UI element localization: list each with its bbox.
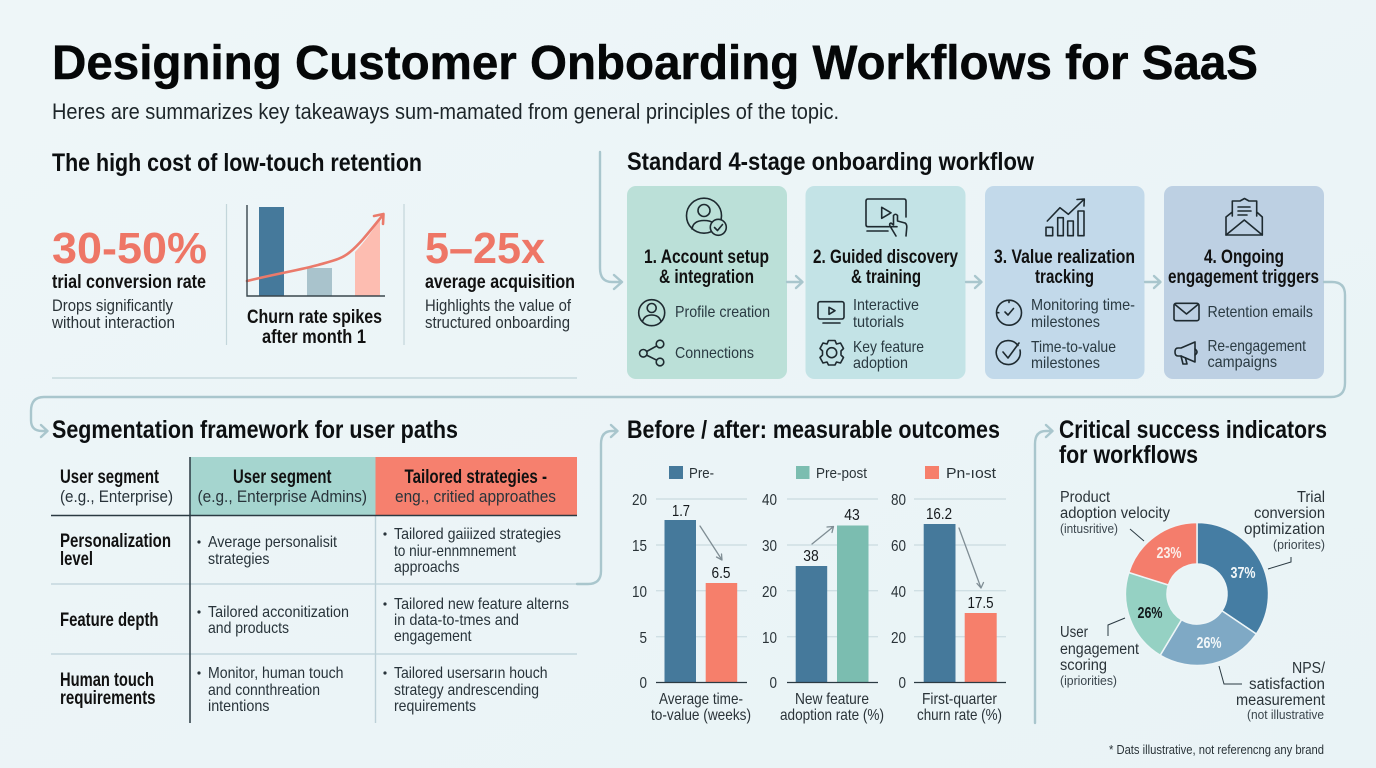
icon: connections — [640, 340, 664, 366]
donut percentages — [1138, 545, 1256, 652]
label: user engagement scoring: scoring — [1060, 657, 1107, 674]
row: personalization level — [60, 526, 561, 576]
row: human touch requirements: requirements — [60, 688, 156, 709]
card: account setup: 1. Account setup — [644, 247, 769, 268]
panel: before and after outcomes — [627, 416, 1006, 724]
label: product adoption velocity: Product — [1060, 489, 1111, 506]
card: ongoing engagement: Retention emails — [1208, 304, 1313, 321]
label: product adoption velocity: adoption velocity — [1060, 505, 1170, 522]
icon: video tutorial — [866, 199, 907, 236]
subtitle: Heres are summarizes key takeaways sum-mamated from general principles of the topic. — [52, 99, 839, 124]
chart: first-quarter churn: 16.2 — [926, 506, 952, 523]
label: NPS satisfaction measurement: (not illustrative — [1247, 707, 1324, 722]
chart: time to value: 0 — [640, 675, 647, 692]
row: personalization level: approachs — [394, 559, 460, 576]
card: ongoing engagement: engagement triggers — [1168, 267, 1319, 288]
icon: clock — [996, 300, 1022, 325]
donut percentages: 23% — [1156, 545, 1182, 562]
heading: outcomes: Before / after: measurable outcomes — [627, 416, 1000, 444]
panel: standard 4-stage workflow — [627, 148, 1324, 379]
chart: first-quarter churn: 20 — [891, 630, 906, 647]
chart: first-quarter churn: 80 — [891, 492, 906, 509]
chart: first-quarter churn: 17.5 — [968, 595, 994, 612]
chart: time to value: 10 — [632, 584, 647, 601]
donut percentages: 26% — [1138, 605, 1163, 622]
card: value realization: Monitoring time- — [1031, 297, 1135, 314]
label: user engagement scoring: User — [1060, 624, 1088, 641]
card: guided discovery — [806, 186, 966, 379]
card: account setup: Connections — [675, 345, 754, 362]
stat: average acquisition: Highlights the value of — [425, 297, 571, 315]
legend — [669, 465, 997, 482]
label: NPS satisfaction measurement: NPS/ — [1292, 660, 1326, 677]
row: human touch requirements: Monitor, human touch — [208, 665, 344, 682]
chart: feature adoption: 20 — [762, 584, 777, 601]
card: guided discovery: & training — [851, 267, 921, 288]
row: human touch requirements — [60, 665, 548, 715]
card: value realization: Time-to-value — [1031, 339, 1116, 356]
chart: first-quarter churn: churn rate (%) — [917, 707, 1002, 724]
row: human touch requirements: requirements — [394, 698, 476, 715]
table header: (e.g., Enterprise) — [60, 487, 173, 506]
arrow: retention to workflow — [600, 152, 622, 289]
card: guided discovery: adoption — [853, 355, 908, 372]
label: trial conversion optimization: optimization — [1244, 521, 1325, 538]
arrow: stage 2 to 3 — [966, 276, 982, 288]
card: guided discovery: tutorials — [853, 314, 904, 331]
arrow: outcomes to indicators — [1035, 425, 1052, 723]
row: personalization level: to niur-ennmnement — [394, 543, 516, 560]
heading: indicators: Critical success indicators — [1059, 416, 1327, 444]
row: personalization level: level — [60, 549, 93, 570]
arrow: stage 1 to 2 — [787, 276, 802, 288]
label: user engagement scoring — [1060, 618, 1140, 688]
stat: trial conversion: trial conversion rate — [52, 272, 206, 293]
chart: time to value: 20 — [632, 492, 647, 509]
stat: average acquisition: average acquisition — [425, 272, 575, 293]
row: feature depth: engagement — [394, 628, 472, 645]
row: feature depth: Tailored acconitization — [208, 604, 349, 621]
panel: high cost of low-touch retention — [51, 149, 577, 378]
row: feature depth: in data-to-tmes and — [394, 612, 519, 629]
label: trial conversion optimization: (priorites) — [1273, 537, 1325, 552]
chart: churn rate spike: Churn rate spikes — [247, 307, 382, 328]
icon: tutorials — [818, 302, 844, 323]
chart: time to value: 1.7 — [672, 503, 690, 520]
table header: User segment — [60, 467, 160, 488]
icon: profile — [639, 300, 665, 326]
table header: (e.g., Enterprise Admins) — [198, 487, 367, 506]
label: NPS satisfaction measurement: satisfaction — [1249, 676, 1325, 693]
row: human touch requirements: intentions — [208, 698, 270, 715]
heading: segmentation: Segmentation framework for user paths — [52, 416, 458, 444]
label: trial conversion optimization: conversion — [1254, 505, 1325, 522]
chart: feature adoption: New feature — [795, 691, 869, 708]
chart: first-quarter churn: 40 — [891, 584, 906, 601]
stat: trial conversion: 30-50% — [52, 224, 207, 273]
row: personalization level: Average personalisit — [208, 534, 337, 551]
icon: megaphone — [1175, 342, 1197, 364]
icon: gear — [820, 340, 844, 365]
card: value realization: 3. Value realization — [994, 247, 1135, 268]
chart: churn rate spike: after month 1 — [262, 327, 366, 348]
row: personalization level: Personalization — [60, 531, 171, 552]
row: personalization level: strategies — [208, 551, 270, 568]
chart: feature adoption: 30 — [762, 538, 777, 555]
legend: Pn-ıost — [946, 465, 997, 482]
table header — [60, 457, 577, 515]
title: Designing Customer Onboarding Workflows for SaaS — [52, 37, 1258, 90]
heading: indicators: for workflows — [1059, 441, 1198, 469]
row: feature depth — [60, 596, 569, 645]
row: feature depth: Tailored new feature alterns — [394, 596, 569, 613]
arrow: workflow to segmentation — [31, 282, 1345, 437]
stat: average acquisition: 5–25x — [425, 224, 546, 273]
icon: growth chart — [1046, 199, 1084, 236]
label: NPS satisfaction measurement — [1219, 660, 1326, 722]
card: account setup: & integration — [659, 267, 754, 288]
icon: mail — [1174, 303, 1199, 321]
donut percentages: 37% — [1230, 565, 1256, 582]
chart: time to value — [632, 492, 751, 724]
row: personalization level: Tailored gaiiized strategies — [394, 526, 561, 543]
legend: Pre-post — [816, 465, 868, 482]
card: ongoing engagement: Re-engagement — [1208, 338, 1306, 355]
card: value realization: milestones — [1031, 314, 1100, 331]
chart: first-quarter churn: 60 — [891, 538, 906, 555]
chart: feature adoption — [762, 492, 884, 724]
row: human touch requirements: strategy andrescending — [394, 682, 539, 699]
card: ongoing engagement: 4. Ongoing — [1204, 247, 1284, 268]
stat: average acquisition — [425, 224, 575, 332]
heading: retention: The high cost of low-touch retention — [52, 149, 422, 177]
chart: feature adoption: 40 — [762, 492, 777, 509]
donut percentages: 26% — [1196, 635, 1222, 652]
row: feature depth: and products — [208, 620, 289, 637]
chart: feature adoption: 10 — [762, 630, 777, 647]
chart: time to value: 5 — [640, 630, 647, 647]
chart: feature adoption: adoption rate (%) — [780, 707, 884, 724]
label: product adoption velocity: (intusritive) — [1060, 521, 1118, 536]
table header: eng., critied approathes — [395, 487, 556, 506]
stat: trial conversion: Drops significantly — [52, 297, 174, 315]
card: account setup — [627, 186, 787, 379]
arrow: stage 3 to 4 — [1145, 276, 1160, 288]
label: product adoption velocity — [1060, 489, 1170, 541]
chart: time to value: 6.5 — [712, 565, 731, 582]
heading: workflow: Standard 4-stage onboarding workflow — [627, 148, 1034, 176]
row: human touch requirements: Human touch — [60, 670, 154, 691]
icon: user check — [686, 198, 726, 235]
chart: first-quarter churn: 0 — [898, 675, 906, 692]
label: trial conversion optimization — [1244, 489, 1325, 569]
row: human touch requirements: Tailored usersarın houch — [394, 665, 548, 682]
chart: first-quarter churn — [891, 492, 1006, 724]
chart: feature adoption: 43 — [844, 507, 860, 524]
card: value realization: milestones — [1031, 355, 1100, 372]
card: account setup: Profile creation — [675, 304, 770, 321]
row: human touch requirements: and connthreation — [208, 682, 320, 699]
heading: indicators — [1059, 416, 1327, 469]
chart: time to value: 15 — [632, 538, 647, 555]
icon: check circle — [996, 341, 1020, 365]
chart: feature adoption: 0 — [770, 675, 777, 692]
panel: critical success indicators — [1059, 416, 1327, 722]
card: guided discovery: 2. Guided discovery — [813, 247, 958, 268]
chart: churn rate spike — [247, 205, 385, 348]
stat: average acquisition: structured onboarding — [425, 314, 570, 332]
card: value realization — [985, 186, 1144, 379]
label: user engagement scoring: engagement — [1060, 641, 1140, 658]
row: feature depth: Feature depth — [60, 610, 158, 631]
donut chart — [1125, 522, 1269, 666]
legend: Pre- — [689, 465, 714, 482]
label: trial conversion optimization: Trial — [1297, 489, 1325, 506]
table header: Tailored strategies - — [404, 467, 547, 488]
card: value realization: tracking — [1035, 267, 1094, 288]
arrow: segmentation to outcomes — [577, 425, 618, 584]
stat: trial conversion: without interaction — [51, 314, 175, 332]
icon: envelope with letter — [1226, 198, 1262, 235]
chart: feature adoption: 38 — [803, 548, 819, 565]
label: user engagement scoring: (ipriorities) — [1060, 673, 1117, 688]
stat: trial conversion — [51, 224, 207, 332]
card: guided discovery: Interactive — [853, 297, 919, 314]
footnote: * Dats illustrative, not referencng any brand — [1109, 743, 1324, 757]
table header: User segment — [233, 467, 332, 488]
chart: first-quarter churn: First-quarter — [922, 691, 998, 708]
panel: segmentation framework — [51, 416, 577, 723]
card: ongoing engagement: campaigns — [1208, 354, 1277, 371]
chart: time to value: to-value (weeks) — [651, 707, 751, 724]
chart: time to value: Average time- — [659, 691, 743, 708]
card: guided discovery: Key feature — [853, 339, 924, 356]
card: ongoing engagement — [1164, 186, 1324, 379]
label: NPS satisfaction measurement: measurement — [1236, 692, 1326, 709]
